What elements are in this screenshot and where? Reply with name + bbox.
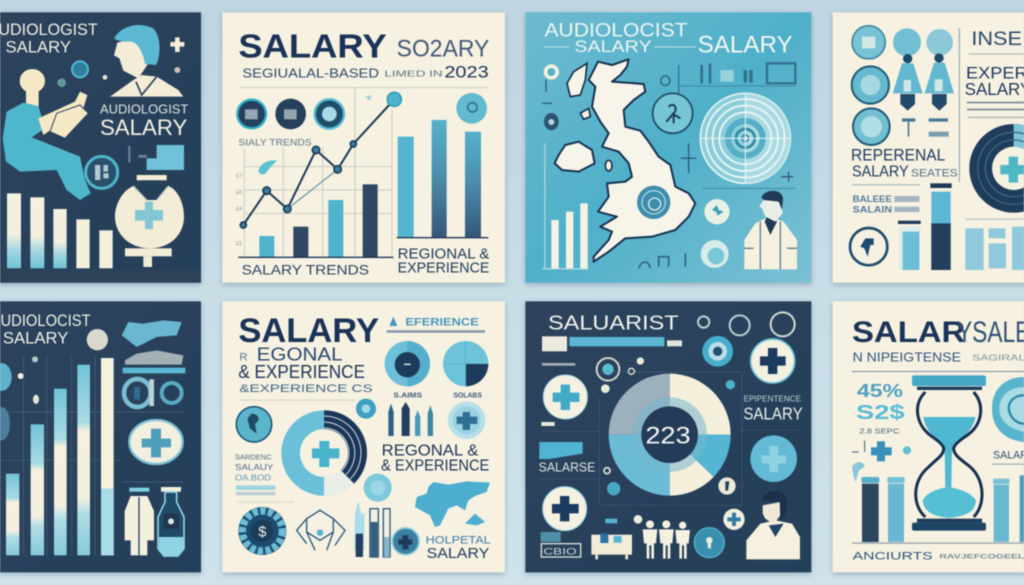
title: faded salary: SO2ARY (397, 36, 489, 63)
chart: pie left (385, 341, 430, 386)
panel: bottom-left dark bars poster (0, 301, 201, 572)
icon: plus top right (751, 339, 795, 383)
title: salary left: SALARY (574, 37, 652, 56)
chart: pie right (443, 341, 488, 386)
footer fine print: RAVJEFCOGEEL (939, 554, 1024, 561)
label: regional: REGIONAL & (398, 246, 490, 262)
icon: badge left (236, 407, 272, 442)
label: salary small (852, 184, 920, 215)
graphic: abstract salary scribble (122, 320, 185, 373)
heading: insights: INSEI (971, 29, 1024, 50)
axis labels: £4 (236, 207, 242, 213)
icon: teal ring (72, 61, 88, 77)
icon: moon (87, 329, 108, 350)
icon: plus left upper (543, 375, 587, 419)
icon: coin wheel (238, 507, 286, 555)
bars: left columns (861, 477, 905, 542)
bar chart: salary bars (7, 193, 113, 268)
icon: hospital badge (392, 528, 419, 555)
map: Ireland (555, 142, 595, 172)
panel: top-left dark audiologist poster (0, 12, 201, 283)
icon: small dots (57, 67, 180, 87)
illustration: doctor (744, 191, 797, 269)
icon: pens (388, 402, 433, 436)
label: salary trends: SALARY TRENDS (242, 262, 369, 278)
icon: monitor (128, 145, 184, 170)
subtitle: faded: SAGIRAL (972, 354, 1024, 363)
icon: ring (597, 358, 619, 381)
heading: reperenal: REPERENAL (851, 146, 945, 165)
line chart: salary trend (240, 92, 401, 228)
label: salarse: SALARSE (539, 460, 595, 474)
icon: teal splashes (258, 95, 372, 174)
panel: bottom-right cream hourglass poster (833, 301, 1024, 572)
title: audiologist salary center: AUDIOLOGIST (100, 102, 189, 116)
icons: left side shapes (0, 356, 39, 440)
labels: pies: S.AIMS (393, 390, 422, 399)
label: experience salary: EPIPENTENCE (744, 393, 801, 403)
subtitle: N NIPEIGTENSE (853, 350, 961, 364)
footer label: ANCIURTS (853, 550, 933, 562)
bar chart: salary trends (238, 184, 393, 258)
icon: pin ring (544, 64, 559, 92)
icon: cross (852, 440, 911, 461)
icon: box label (541, 532, 581, 557)
icon: bottle (158, 487, 184, 556)
panel: bottom-right dark donut poster (525, 301, 811, 572)
strip: teal header bar (542, 336, 682, 351)
text block: fine print (967, 53, 1024, 118)
map: Great Britain (589, 59, 695, 262)
icon: teal eye (702, 336, 733, 367)
icon: circle with figure (653, 93, 693, 133)
title: salary: SALAR (852, 316, 966, 349)
bars: right columns (993, 475, 1024, 542)
map marker: spiral (637, 186, 670, 219)
icons: left column rings (852, 26, 890, 145)
title: salary: SALARY (238, 312, 379, 350)
subtitle: faded: &EXPERIENCE CS (239, 383, 373, 395)
label: salary: SALARY (743, 403, 803, 423)
icon: medallion (704, 199, 730, 224)
title: salary: SALARY (3, 329, 68, 348)
icon: badge small (356, 399, 376, 419)
label: salarse (539, 442, 595, 474)
icon: teal lock (694, 528, 724, 558)
icon: top-right badge (456, 93, 487, 124)
chart: salary donut (609, 374, 731, 496)
title: salary right: SALARY (698, 31, 793, 58)
chart: donut with cross (969, 124, 1024, 213)
decorative: dark floor (0, 269, 201, 283)
chart: donut with cross (281, 410, 367, 496)
icon: teal plus (750, 435, 797, 482)
bar chart: small bars (542, 143, 589, 269)
icon: hourglass (912, 375, 986, 531)
icon: small plus (723, 509, 745, 530)
small circles near donut (607, 380, 736, 495)
heading: experience: & EXPERIENCE (381, 457, 489, 474)
subtitle: regional: EGONAL (257, 343, 343, 364)
heading: experience: EFERIENCE (405, 316, 479, 328)
label: salary: SALARY (427, 546, 490, 562)
text block: left labels (235, 452, 275, 495)
label: salary small: SALAIN (853, 205, 892, 215)
subtitle: experience: & EXPERIENCE (238, 361, 365, 382)
subtitle: limed in: LIMED IN (384, 69, 443, 79)
illustration: doctor (746, 491, 800, 559)
stat: value: S2$ (856, 402, 905, 424)
map: world regions (415, 481, 490, 527)
icon: small arrows (681, 143, 793, 182)
panel: top-right cream insights poster (833, 12, 1024, 283)
labels: pies: SOLABS (453, 390, 482, 399)
heading: salary seates: SALARY (852, 164, 909, 181)
panel: top-center salary trends poster (222, 12, 505, 283)
icon: teal headphone (992, 377, 1024, 442)
icon: ring with emblem (850, 228, 887, 265)
title: saluarist: SALUARIST (548, 311, 679, 334)
icon: box label: CBIO (543, 547, 577, 557)
icons: drip pendant right (925, 29, 954, 111)
bars: tall column (930, 183, 952, 270)
icons: top small row (698, 312, 795, 336)
label: hospital: HOLPETAL (426, 535, 491, 547)
subtitle: SEGIUALAL-BASED (242, 66, 379, 80)
icon: equipment (591, 515, 642, 559)
title: audiolocist: AUDIOLOCIST (544, 21, 688, 42)
icon: plus sparkle (170, 37, 184, 52)
icon: top icon strip (661, 63, 795, 93)
icon: plus left lower (543, 487, 587, 531)
divider line (959, 28, 960, 182)
icons: three round badges (237, 99, 344, 129)
labels: pies (393, 390, 482, 399)
map: islands (567, 63, 612, 171)
bar chart: regional (397, 120, 488, 238)
axis labels: £6 (236, 190, 242, 196)
text block: left labels: SALAUY (235, 462, 274, 472)
subtitle: year: 2023 (444, 62, 489, 81)
icon: coin wheel: $ (258, 524, 266, 540)
icon: balloon (852, 462, 865, 482)
panel: bottom-center experience poster (222, 301, 505, 572)
heading: regional: REGONAL & (382, 442, 478, 459)
stat: small caption: 2.8 SEPC (859, 427, 900, 436)
stat: percent: 45% (857, 380, 903, 401)
bars: short column (898, 221, 921, 270)
heading: experience (387, 316, 485, 333)
icon: medical oval (129, 420, 183, 464)
icons: twin rings (124, 379, 182, 407)
graphic: hex network (297, 510, 345, 550)
title: salary: SALARY (238, 28, 387, 65)
chart: concentric radar (700, 93, 790, 183)
icons: small labels under pendants (902, 118, 949, 137)
text block: left labels: SARDENC (235, 452, 272, 461)
icon: brain badge (86, 156, 118, 188)
icon: nurse portrait (110, 25, 183, 97)
axis labels: £1 (236, 241, 242, 247)
icon: medical badge (448, 402, 485, 439)
icon: test tubes (354, 500, 390, 557)
heading: seates small: SEATES (911, 168, 958, 180)
title: salary center: SALARY (100, 115, 188, 140)
illustration: seated figure with book (3, 69, 91, 200)
subtitle: salary: SALARY (6, 38, 71, 57)
small icons (541, 357, 644, 474)
icons: bottom-right jars (965, 227, 1024, 270)
label: salary small: BALEEE (853, 194, 892, 204)
panel: top-right teal UK map poster (525, 12, 811, 283)
label: experience: EXPERIENCE (398, 260, 490, 276)
subtitle: regional prefix: R (239, 351, 248, 363)
icon: stethoscope bowl (639, 240, 729, 268)
axis labels (236, 173, 242, 247)
text block: left labels: OA.BOD (235, 473, 271, 483)
icon: round bubble (364, 474, 392, 502)
axis labels: £7 (236, 173, 242, 179)
icon: three people (643, 520, 690, 559)
center value: 223 (645, 423, 691, 450)
icon: lab coat (125, 488, 154, 555)
illustration: lab coat on stand (115, 175, 184, 267)
label: slaly trends: SIALY TRENDS (238, 137, 312, 147)
icon: dark eye (542, 103, 559, 130)
bar chart: tall bars (6, 358, 114, 555)
icons: drip pendant left (893, 28, 923, 111)
